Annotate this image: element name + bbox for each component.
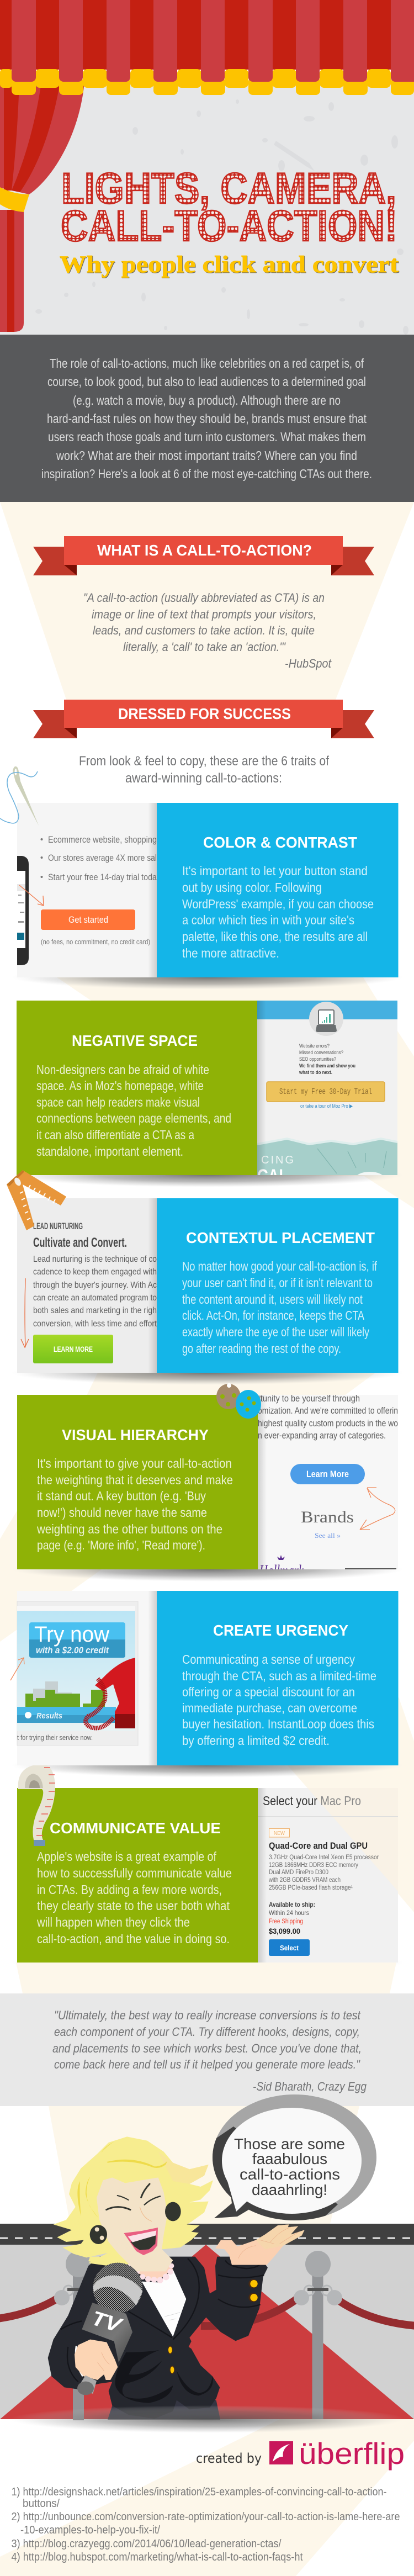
panel: closing quote: "Ultimately, the best way to really increase conversions is to test: [54, 2008, 362, 2022]
text box: create urgency: buyer hesitation. InstantLoop does this: [182, 1717, 374, 1731]
speech bubble: [213, 2094, 376, 2220]
text box: visual hierarchy: It's important to give your call-to-action: [37, 1456, 232, 1471]
screenshot: shopping site example: Get started: [68, 914, 108, 925]
title: [61, 163, 397, 250]
quote: HubSpot definition: leads, and customers to take action. It is, quite: [93, 623, 315, 637]
screenshot: InstantLoop offer: t for trying their service now.: [17, 1733, 93, 1742]
screenshot: custom products page: rtunity to be yourself through: [258, 1393, 360, 1404]
subtitle: Why people click and convert: [60, 252, 399, 278]
spotlight: closing beam: [16, 1963, 396, 2224]
text box: color and contrast: WordPress' example, if you can choose: [182, 897, 374, 911]
screenshot: InstantLoop offer: with a $2.00 credit: [36, 1645, 109, 1655]
text box: visual hierarchy: the weighting that it deserves and make: [37, 1473, 233, 1487]
text box: negative space: space. As in Moz's homepage, white: [36, 1078, 204, 1093]
spotlight beams behind trait panels: [0, 977, 414, 1912]
text box: contextual placement: the content around it, users will likely not: [182, 1292, 363, 1306]
shadow: trait panel 6: [12, 1950, 404, 1975]
screenshot: Act-On lead nurturing: Cultivate and Convert.: [33, 1235, 127, 1250]
screenshot: custom products page: n ever-expanding array of categories.: [258, 1430, 386, 1441]
speech bubble: faaabulous: [252, 2150, 327, 2167]
quote: HubSpot definition: image or line of text that prompts your visitors,: [92, 607, 316, 621]
screenshot: shopping site example: Ecommerce website, shopping: [48, 834, 157, 845]
text box: negative space: [17, 1001, 257, 1175]
text box: communicate value: they clearly state to the user both what: [37, 1898, 230, 1913]
screenshot: Apple Mac Pro configurator: Dual AMD FirePro D300: [269, 1869, 328, 1876]
references list: 3) http://blog.crazyegg.com/2014/06/10/lead-generation-ctas/: [11, 2538, 282, 2550]
section intro text: [79, 754, 329, 786]
text box: communicate value: call-to-action, and the value in doing so.: [37, 1932, 230, 1946]
text box: color and contrast: COLOR & CONTRAST: [203, 834, 357, 851]
reporter raised hand: [215, 2224, 305, 2265]
screenshot: Apple Mac Pro configurator: $3,099.00: [269, 1927, 300, 1935]
quote: HubSpot definition: literally, a 'call' to take an 'action.'": [123, 640, 286, 654]
reporter head and hair: [54, 2136, 213, 2271]
text box: contextual placement: CONTEXTUL PLACEMENT: [186, 1229, 375, 1246]
text box: color and contrast: a color which ties in with your site's: [182, 913, 354, 927]
icon: red telephone: [86, 1658, 135, 1728]
icon: measuring tape: [18, 1765, 55, 1846]
text box: contextual placement: click. Act-On, for instance, keeps the CTA: [182, 1308, 365, 1323]
panel: negative space: [17, 1001, 397, 1187]
text box: negative space: Non-designers can be afraid of white: [36, 1062, 209, 1077]
text box: visual hierarchy: page (e.g. 'More info', 'Read more').: [37, 1538, 205, 1552]
screenshot: shopping site example: (no fees, no commitment, no credit card): [41, 938, 150, 946]
screenshot: custom products page: Hallmark: [259, 1562, 304, 1580]
screenshot: Apple Mac Pro configurator: 256GB PCIe-based flash storage¹: [269, 1885, 353, 1891]
red carpet scene: [0, 2224, 414, 2420]
spotlight: definition beam: [0, 502, 414, 700]
ribbon heading: what is a call-to-action: [33, 536, 374, 575]
text box: negative space: space can help readers make visual: [36, 1095, 200, 1109]
screenshot: Apple Mac Pro configurator: Within 24 hours: [269, 1910, 309, 1917]
screenshot: Act-On lead nurturing: both sales and marketing in the righ: [33, 1306, 157, 1315]
screenshot: Moz homepage: CING: [261, 1154, 294, 1166]
spotlight: footer beam: [0, 2419, 414, 2576]
text box: create urgency: immediate purchase, can overcome: [182, 1701, 357, 1715]
text box: create urgency: Communicating a sense of urgency: [182, 1652, 355, 1667]
shadow: trait panel 5: [12, 1753, 404, 1778]
text box: visual hierarchy: now!') should never have the same: [37, 1505, 207, 1520]
text box: visual hierarchy: [17, 1395, 258, 1569]
screenshot: Moz homepage: We find them and show you: [299, 1063, 355, 1069]
references list: buttons/: [23, 2498, 60, 2510]
references list: 4) http://blog.hubspot.com/marketing/what-is-call-to-action-faqs-ht: [11, 2551, 303, 2563]
velvet ropes: [0, 2297, 414, 2326]
text box: communicate value: Apple's website is a great example of: [37, 1849, 217, 1864]
screenshot: Apple Mac Pro configurator: Available to ship:: [269, 1902, 315, 1908]
panel: communicate value: [17, 1788, 398, 1963]
screenshot: Moz homepage: CAL: [257, 1166, 288, 1187]
icon: laptop chart: [316, 1010, 337, 1032]
left stage curtain drape: [0, 82, 84, 332]
text box: communicate value: will happen when they click the: [36, 1915, 190, 1929]
stage backdrop: [0, 82, 414, 335]
ribbon heading: dressed for success: [33, 700, 374, 738]
text box: create urgency: by offering a limited $2 credit.: [182, 1733, 330, 1748]
speech bubble: daaahrling!: [252, 2181, 327, 2198]
quote: HubSpot definition: [83, 591, 332, 670]
screenshot: InstantLoop offer: [10, 1591, 157, 1765]
speech bubble: Those are some: [234, 2135, 345, 2152]
screenshot: shopping site example: Start your free 14-day trial toda: [48, 872, 157, 882]
screenshot: Act-On lead nurturing: through the buyer's journey. With Ac: [33, 1281, 157, 1290]
text box: color and contrast: the more attractive.: [182, 946, 279, 960]
quote: HubSpot definition: -HubSpot: [285, 657, 332, 670]
panel: create urgency: [10, 1591, 399, 1765]
screenshot: Apple Mac Pro configurator: Free Shipping: [269, 1918, 303, 1925]
microphone: [75, 2257, 142, 2395]
screenshot: custom products page: [258, 1393, 398, 1580]
text box: color and contrast: It's important to let your button stand: [182, 864, 368, 878]
screenshot: custom products page: See all »: [315, 1531, 341, 1540]
shadow: trait panel 4: [12, 1557, 404, 1581]
screenshot: Moz homepage: or take a tour of Moz Pro ▶: [300, 1103, 353, 1109]
shadow: trait panel 1: [12, 965, 404, 990]
screenshot: Apple Mac Pro configurator: Quad-Core and Dual GPU: [269, 1840, 368, 1851]
panel: contextual placement: [17, 1198, 399, 1373]
screenshot: Act-On lead nurturing: LEAD NURTURING: [33, 1221, 83, 1231]
screenshot: Apple Mac Pro configurator: Select your Mac Pro: [263, 1794, 361, 1808]
shadow: trait panel 2: [12, 1163, 404, 1187]
stanchion posts: [54, 2251, 342, 2420]
text box: create urgency: [157, 1591, 399, 1765]
panel: closing quote: [0, 1993, 414, 2106]
screenshot: InstantLoop offer: Try now: [34, 1622, 109, 1647]
screenshot: custom products page: Learn More: [306, 1469, 349, 1479]
screenshot: Apple Mac Pro configurator: [258, 1788, 398, 1963]
carpet: [0, 2245, 414, 2419]
panel: color and contrast: [17, 803, 399, 977]
text box: contextual placement: go after reading the rest of the copy.: [182, 1341, 341, 1356]
reporter body: [48, 2257, 268, 2420]
screenshot: Act-On lead nurturing: Lead nurturing is the technique of co: [33, 1255, 157, 1264]
top curtain valance: [0, 0, 414, 95]
panel: closing quote: each component of your CTA. Try different hooks, designs, copy,: [54, 2025, 360, 2039]
ribbon heading: what is a call-to-action: WHAT IS A CALL-TO-ACTION?: [97, 542, 312, 559]
screenshot: Moz homepage: [257, 1001, 397, 1187]
screenshot: Moz homepage: SEO opportunities?: [299, 1056, 336, 1062]
quote: HubSpot definition: "A call-to-action (usually abbreviated as CTA) is an: [83, 591, 325, 605]
shadow: scene floor: [10, 2405, 405, 2433]
section intro text: award-winning call-to-actions:: [125, 771, 282, 786]
text box: negative space: it can also differentiate a CTA as a: [36, 1128, 194, 1142]
screenshot: custom products page: Brands: [301, 1508, 354, 1526]
shadow: trait panel 3: [12, 1361, 404, 1385]
screenshot: Apple Mac Pro configurator: with 2GB GDDR5 VRAM each: [268, 1877, 341, 1884]
screenshot: Apple Mac Pro configurator: NEW: [274, 1831, 285, 1837]
screenshot: Moz homepage: Website errors?: [299, 1043, 330, 1049]
panel: closing quote: -Sid Bharath, Crazy Egg: [253, 2080, 367, 2093]
screenshot: Act-On lead nurturing: can create an automated program to: [33, 1293, 157, 1303]
text box: negative space: connections between page elements, and: [36, 1111, 231, 1125]
text box: create urgency: CREATE URGENCY: [213, 1622, 348, 1639]
credit: created by uberflip: überflip: [299, 2436, 405, 2471]
text box: communicate value: [17, 1788, 258, 1963]
text box: color and contrast: palette, like this one, the results are all: [182, 929, 368, 944]
ribbon heading: dressed for success: DRESSED FOR SUCCESS: [118, 705, 291, 722]
screenshot: shopping site example: Our stores average 4X more sal: [48, 853, 157, 863]
section intro text: From look & feel to copy, these are the 6 traits of: [79, 754, 329, 769]
screenshot: Moz homepage: Missed conversations?: [299, 1050, 343, 1056]
panel: closing quote: and placements to see which works best. Once you've done that,: [52, 2041, 362, 2055]
panel: intro text band: work? What are their most important traits? Where can you find: [56, 448, 357, 463]
panel: closing quote: come back here and tell us if it helped you generate more leads.": [54, 2057, 360, 2071]
icon: angle ruler: [7, 1170, 66, 1230]
screenshot: Apple Mac Pro configurator: 12GB 1866MHz DDR3 ECC memory: [269, 1862, 358, 1869]
screenshot: Apple Mac Pro configurator: Select: [280, 1944, 299, 1952]
icon: uberflip logo mark: [269, 2441, 293, 2464]
text box: communicate value: in CTAs. By adding a few more words,: [37, 1882, 222, 1897]
panel: visual hierarchy: [17, 1393, 398, 1580]
icon: sewing buttons: [216, 1383, 261, 1419]
screenshot: Act-On lead nurturing: LEARN MORE: [54, 1345, 93, 1353]
credit: created by uberflip: created by: [196, 2451, 262, 2466]
screenshot: shopping site example: [17, 803, 157, 977]
references list: -10-examples-to-help-you-fix-it/: [20, 2524, 160, 2536]
text box: create urgency: offering or a special discount for an: [182, 1685, 355, 1699]
illustration: red carpet reporter: [48, 2136, 305, 2420]
text box: contextual placement: [157, 1198, 399, 1373]
text box: color and contrast: out by using color. Following: [182, 880, 322, 895]
screenshot: Act-On lead nurturing: [17, 1198, 157, 1373]
icon: needle and thread: [0, 766, 39, 826]
screenshot: Act-On lead nurturing: cadence to keep them engaged with: [33, 1267, 157, 1277]
speech bubble: call-to-actions: [240, 2166, 340, 2183]
microphone TV label: TV: [89, 2307, 126, 2337]
references list: [11, 2486, 400, 2563]
panel: intro text band: [0, 335, 414, 502]
credit: created by uberflip: [196, 2436, 405, 2471]
text box: visual hierarchy: it stand out. A key button (e.g. 'Buy: [37, 1489, 206, 1503]
text box: negative space: NEGATIVE SPACE: [72, 1032, 198, 1049]
text box: communicate value: how to successfully communicate value: [37, 1866, 232, 1880]
screenshot: Apple Mac Pro configurator: 3.7GHz Quad-Core Intel Xeon E5 processor: [269, 1854, 379, 1861]
text box: negative space: standalone, important element.: [36, 1144, 183, 1159]
screenshot: Act-On lead nurturing: conversion, with less time and effort: [33, 1319, 157, 1329]
screenshot: Moz homepage: Start my Free 30-Day Trial: [279, 1087, 372, 1097]
screenshot: Moz homepage: what to do next.: [299, 1070, 332, 1076]
text box: create urgency: through the CTA, such as a limited-time: [182, 1669, 376, 1683]
screenshot: InstantLoop offer: Results: [36, 1711, 62, 1721]
panel: intro text band: (e.g. watch a movie, buy a product). Although there are no: [73, 393, 341, 408]
text box: visual hierarchy: weighting as the other buttons on the: [36, 1522, 222, 1536]
text box: communicate value: COMMUNICATE VALUE: [50, 1819, 221, 1837]
text box: color and contrast: [157, 803, 399, 977]
text box: visual hierarchy: VISUAL HIERARCHY: [62, 1426, 209, 1443]
